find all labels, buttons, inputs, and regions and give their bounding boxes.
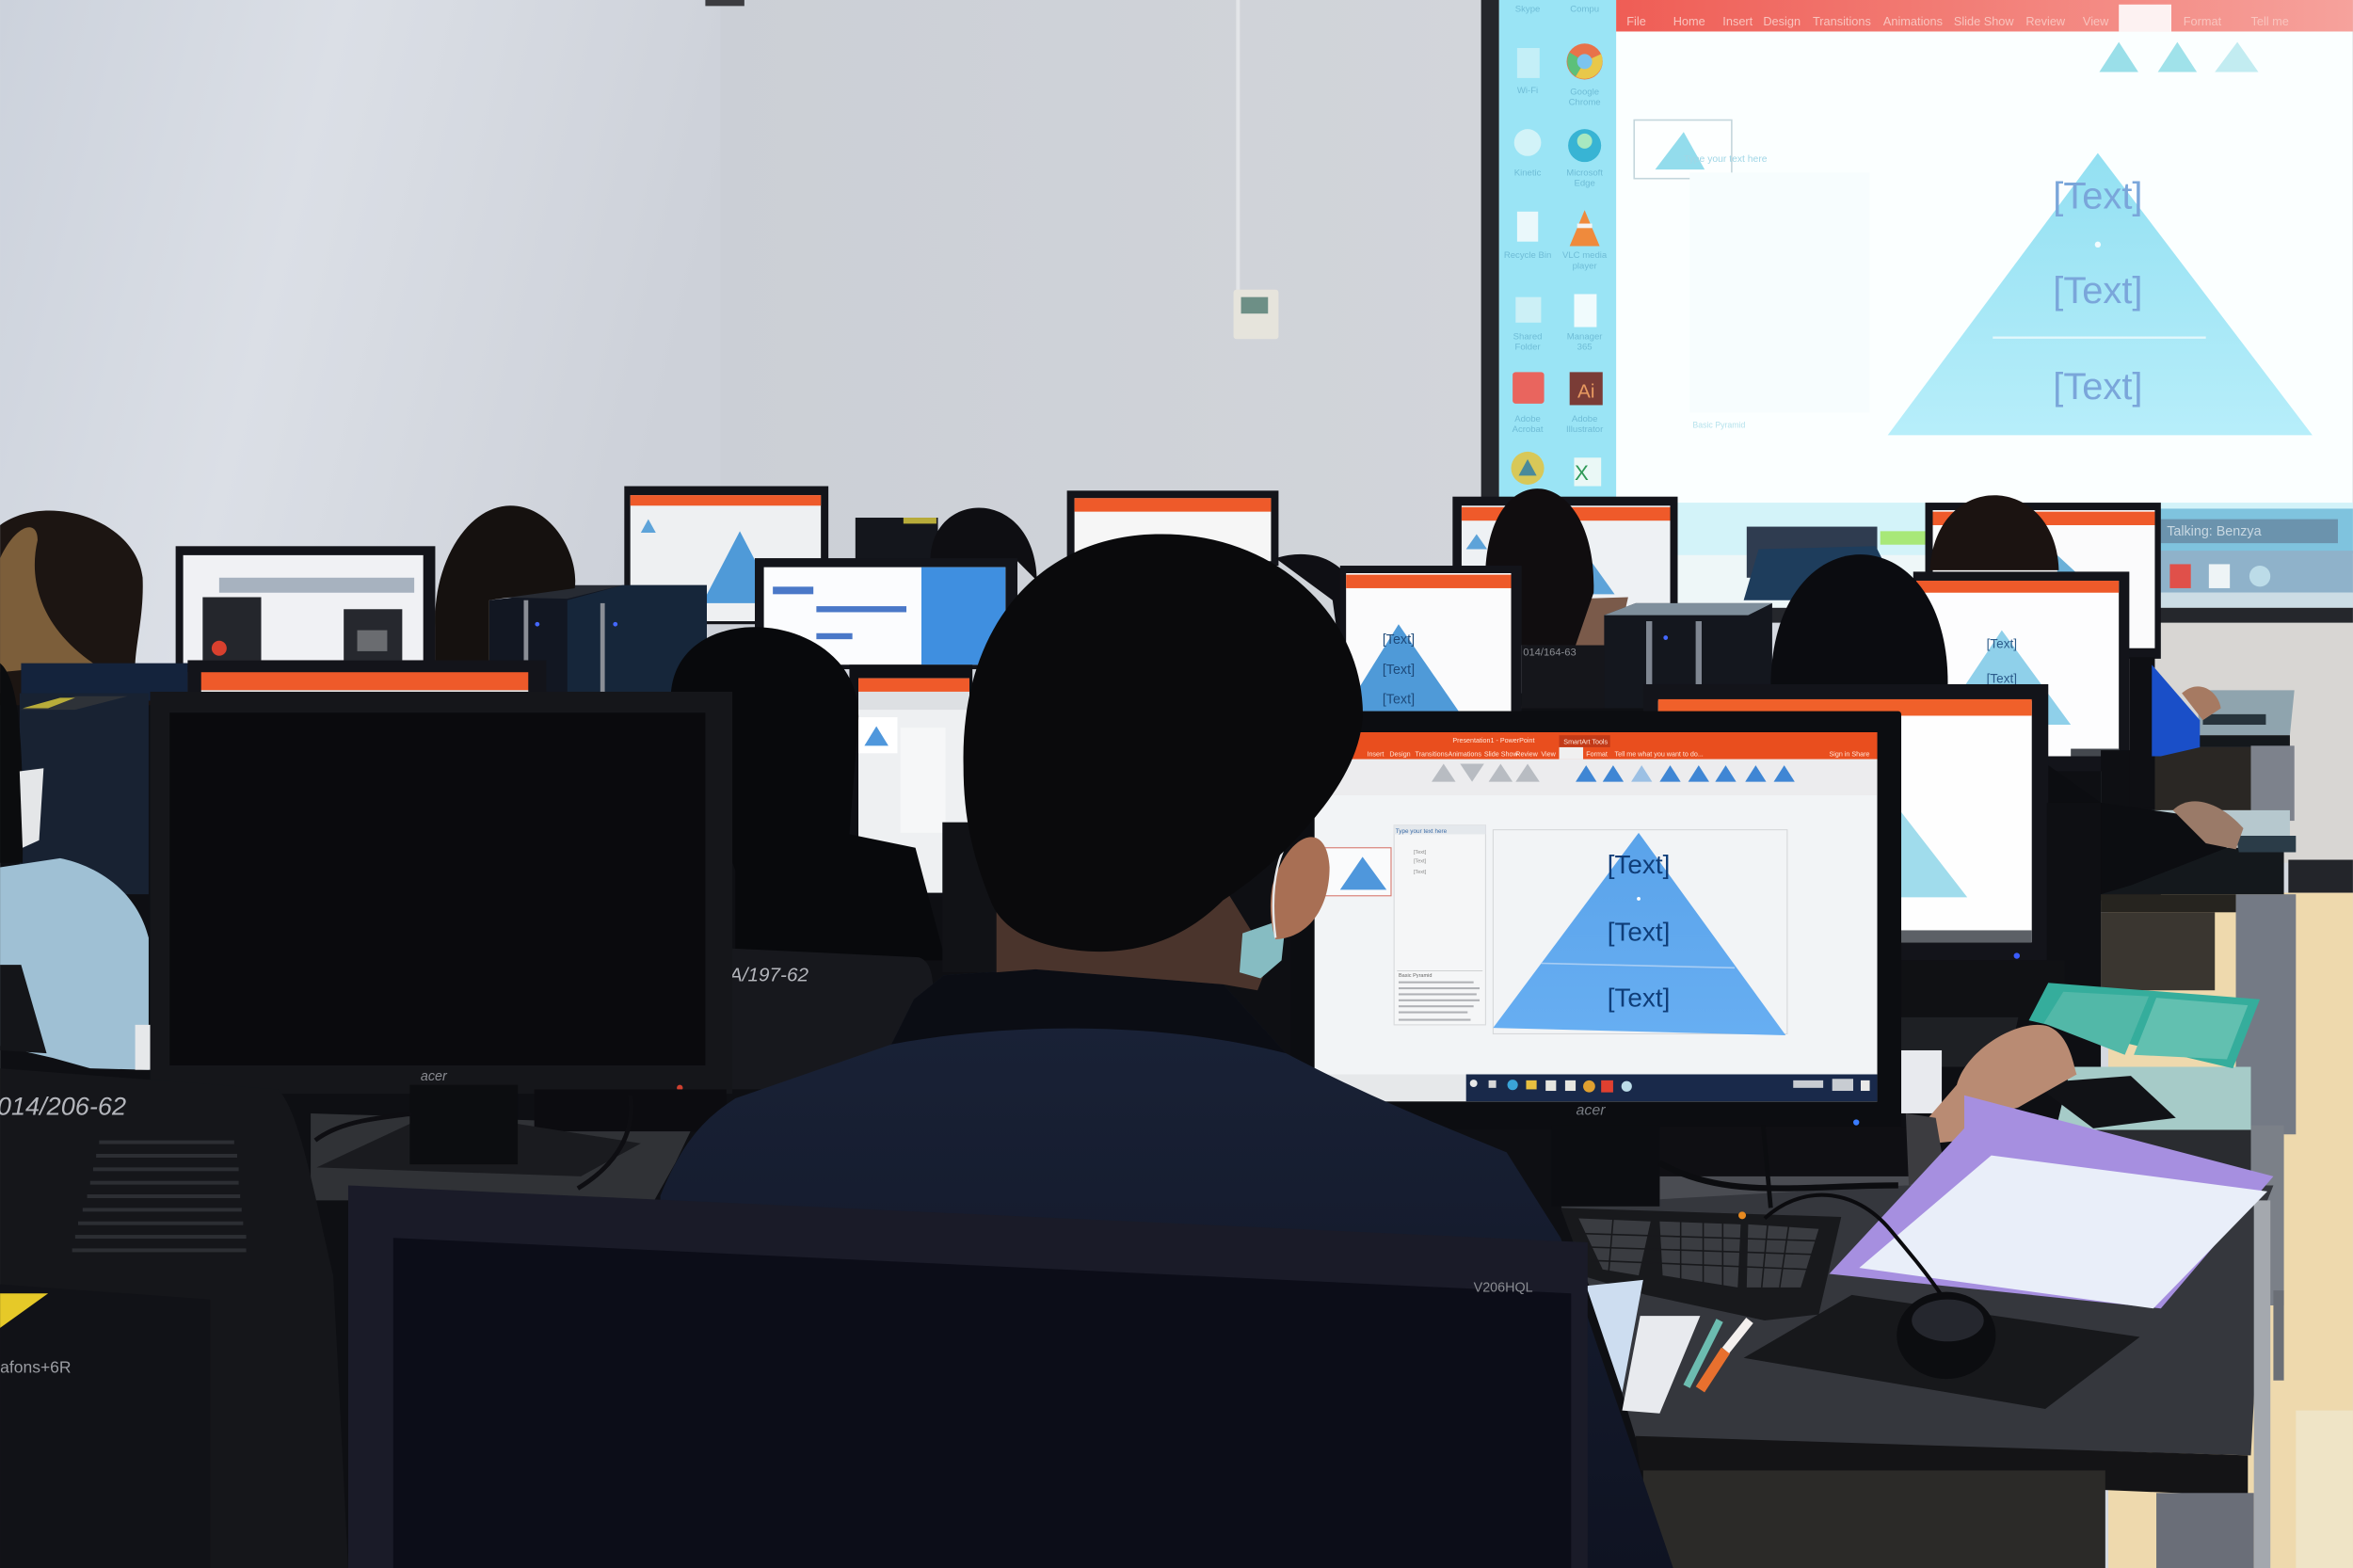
ribbon: Share bbox=[1851, 751, 1870, 759]
tower next to head bbox=[942, 823, 998, 972]
back monitor right of centre bbox=[1452, 497, 1677, 616]
desk underside bbox=[1643, 1470, 2105, 1568]
main monitor with pyramid slide: acer bbox=[1577, 1103, 1606, 1119]
smartart text pane: Basic Pyramid bbox=[1399, 973, 1433, 979]
large dark monitor foreground: V206HQL bbox=[1474, 1281, 1533, 1296]
slide thumbnail bbox=[1325, 848, 1391, 896]
monitor behind head, left bbox=[849, 664, 972, 897]
powerpoint ribbon: View bbox=[2083, 14, 2109, 28]
ribbon gallery bbox=[1315, 760, 1878, 795]
ribbon: Insert bbox=[1367, 751, 1384, 759]
student hand and mouse at right bbox=[1901, 1025, 2176, 1185]
back row: monitors and students bbox=[0, 487, 2161, 708]
ribbon: Animations bbox=[1449, 751, 1481, 759]
black office chair with label bbox=[0, 1068, 348, 1568]
smartart text pane: Type your text here bbox=[1396, 828, 1448, 835]
chair with label bbox=[728, 949, 934, 1089]
projection screen bbox=[1481, 0, 2353, 623]
pyramid on screen: [Text] bbox=[2053, 366, 2142, 408]
main desk bbox=[1561, 1174, 2273, 1568]
tower bottom left: afons+6R bbox=[0, 1358, 72, 1377]
wall: right lower section, baseboard and floor bbox=[2108, 616, 2353, 1568]
ceiling fixture bbox=[705, 0, 744, 6]
woman far left bbox=[0, 511, 187, 705]
lower screen band: Talking: Benzya bbox=[2167, 524, 2262, 539]
hair behind main student bbox=[1275, 554, 1378, 708]
far-left second-row monitor top bbox=[187, 660, 546, 699]
desktop icons on screen: Microsoft bbox=[1566, 168, 1603, 179]
right desks and student arms bbox=[2048, 657, 2296, 1381]
thumbnail and style gallery on screen: Type your text here bbox=[1684, 154, 1768, 165]
computer towers left bbox=[489, 518, 938, 696]
powerpoint ribbon: Home bbox=[1673, 14, 1705, 28]
powerpoint ribbon: Insert bbox=[1722, 14, 1753, 28]
students in back rows: 014/164-63 bbox=[1523, 648, 1577, 659]
pyramid on screen: [Text] bbox=[2053, 176, 2142, 217]
neck bbox=[997, 886, 1270, 990]
desktop icons on screen: Adobe bbox=[1572, 414, 1597, 424]
pens bbox=[1687, 1320, 1750, 1389]
main monitor stand and rear vent bbox=[1552, 1126, 1909, 1208]
lower screen band bbox=[1500, 503, 2353, 608]
green folder bbox=[2029, 983, 2260, 1068]
face mask bbox=[1240, 919, 1286, 978]
tower in front, right of centre bbox=[1604, 603, 1772, 708]
desktop icons on screen: Folder bbox=[1515, 342, 1541, 352]
second keyboard behind bbox=[1901, 1017, 2018, 1067]
purple folder with papers bbox=[1830, 1096, 2273, 1308]
monitor with pyramid at right: [Text] bbox=[1987, 671, 2017, 685]
wall: centre section bbox=[720, 0, 1489, 631]
monitor with pyramid and text: [Text] bbox=[1383, 663, 1415, 678]
large dark monitor foreground bbox=[348, 1185, 1588, 1568]
slide selection frame bbox=[1493, 830, 1787, 1033]
mouse pad bbox=[1744, 1295, 2140, 1409]
papers next to keyboard bbox=[1586, 1280, 1700, 1414]
left side student in light blue bbox=[0, 664, 153, 1070]
powerpoint ribbon: Slide Show bbox=[1954, 14, 2014, 28]
desk surface bbox=[1561, 1185, 2273, 1455]
powerpoint ribbon: Format bbox=[2184, 14, 2222, 28]
wall: left section bbox=[0, 0, 724, 705]
student behind head, left bbox=[671, 627, 945, 960]
back monitor far right bbox=[1926, 503, 2161, 659]
powerpoint ribbon: Transitions bbox=[1813, 14, 1871, 28]
woman left of towers bbox=[435, 505, 575, 660]
ear bbox=[1271, 837, 1330, 939]
thumbnail and style gallery on screen: Basic Pyramid bbox=[1692, 420, 1745, 429]
desktop icons on screen: Chrome bbox=[1569, 98, 1601, 108]
ribbon: Format bbox=[1586, 751, 1608, 759]
desktop icons on screen bbox=[1504, 5, 1608, 487]
head above blue screen bbox=[931, 508, 1037, 581]
ribbon: Tell me what you want to do... bbox=[1615, 751, 1704, 759]
ribbon bbox=[1315, 732, 1878, 760]
ribbon: Transitions bbox=[1415, 751, 1449, 759]
shirt bbox=[661, 969, 1673, 1568]
powerpoint ribbon: File bbox=[1626, 14, 1646, 28]
ribbon: View bbox=[1541, 751, 1557, 759]
monitor with blue window bbox=[755, 558, 1017, 669]
desktop icons on screen: Manager bbox=[1567, 331, 1603, 342]
back monitor centre bbox=[1067, 490, 1278, 566]
dark backdrop behind desks bbox=[0, 694, 2101, 1568]
desktop icons on screen: X bbox=[1575, 461, 1589, 485]
taskbar bbox=[1315, 1074, 1878, 1101]
slide pyramid bbox=[1493, 833, 1785, 1035]
large dark monitor left bbox=[151, 692, 732, 1094]
monitor with pyramid at right: [Text] bbox=[1987, 637, 2017, 651]
mask strap bbox=[1273, 828, 1295, 937]
pyramid on screen bbox=[1888, 153, 2313, 435]
desktop icons on screen: 365 bbox=[1577, 342, 1593, 352]
tower bottom left bbox=[0, 1285, 210, 1568]
students in back rows bbox=[0, 488, 2058, 708]
third desk surface bbox=[2056, 1067, 2250, 1129]
dark zone behind right monitors bbox=[2101, 750, 2161, 901]
second row: monitors bbox=[0, 554, 2296, 1381]
main monitor with pyramid slide bbox=[1290, 712, 1901, 1129]
desktop icons on screen: player bbox=[1573, 261, 1597, 271]
powerpoint ribbon: Design bbox=[1763, 14, 1801, 28]
ribbon: SmartArt Tools bbox=[1563, 739, 1609, 746]
ribbon: Review bbox=[1515, 751, 1539, 759]
pyramid on screen: [Text] bbox=[2053, 270, 2142, 312]
third desk front edge and shadow bbox=[2063, 1129, 2250, 1190]
hair bbox=[964, 534, 1363, 952]
slide pyramid: [Text] bbox=[1608, 918, 1670, 947]
ribbon: Sign in bbox=[1830, 751, 1849, 759]
blue sleeve and hand bbox=[2152, 664, 2221, 757]
smartart text pane: [Text] bbox=[1414, 859, 1427, 865]
thermostat on wall bbox=[1234, 0, 1278, 339]
desktop icons on screen: Wi-Fi bbox=[1517, 86, 1538, 96]
ribbon: Design bbox=[1389, 751, 1411, 759]
black office chair with label: 014/206-62 bbox=[0, 1092, 126, 1121]
powerpoint ribbon: Tell me bbox=[2250, 14, 2289, 28]
desktop icons on screen: Kinetic bbox=[1514, 168, 1542, 179]
area behind main monitor bbox=[1659, 1174, 1922, 1211]
monitor with pyramid and text: [Text] bbox=[1383, 693, 1415, 708]
left desk with monitor stand and cable bbox=[311, 1085, 727, 1200]
large dark monitor left: acer bbox=[421, 1069, 448, 1084]
slide pyramid: [Text] bbox=[1608, 984, 1670, 1013]
student at right with long hair bbox=[1770, 554, 1947, 687]
woman in pink top bbox=[1522, 598, 1628, 708]
monitor behind main, right side bbox=[1643, 684, 2048, 960]
desktop icons on screen: Google bbox=[1570, 87, 1599, 97]
thumbnail and style gallery on screen bbox=[1634, 42, 2258, 429]
tower behind monitor at right bbox=[2047, 803, 2101, 990]
smartart text pane: [Text] bbox=[1414, 850, 1427, 856]
smartart text pane: [Text] bbox=[1414, 870, 1427, 875]
collar bbox=[891, 969, 1286, 1053]
smartart text pane bbox=[1394, 825, 1485, 1025]
desktop icons on screen: Recycle Bin bbox=[1504, 250, 1551, 261]
ribbon: Slide Show bbox=[1484, 751, 1518, 759]
woman far right bbox=[1929, 495, 2058, 570]
foreground student seen from behind bbox=[661, 534, 1673, 1568]
desktop icons on screen: Ai bbox=[1577, 380, 1594, 402]
back desk bbox=[2129, 657, 2295, 821]
chair with label: A/197-62 bbox=[728, 965, 808, 986]
second desk bbox=[2101, 810, 2296, 1134]
desktop icons on screen: Edge bbox=[1574, 179, 1595, 189]
powerpoint ribbon: Review bbox=[2025, 14, 2066, 28]
dark sleeve and hand bbox=[2048, 765, 2244, 894]
area below right monitor bbox=[1899, 960, 2065, 1020]
desktop icons on screen: Shared bbox=[1513, 331, 1542, 342]
computer towers right with navy jacket bbox=[1744, 527, 1903, 600]
monitor with pyramid and text: [Text] bbox=[1383, 632, 1415, 648]
ribbon: Presentation1 - PowerPoint bbox=[1452, 737, 1534, 744]
mouse with cable bbox=[1765, 1195, 1995, 1379]
back monitor with pyramid bbox=[624, 487, 828, 624]
desktop icons on screen: Illustrator bbox=[1566, 424, 1604, 435]
desktop icons on screen: Compu bbox=[1570, 5, 1599, 15]
desktop icons on screen: Adobe bbox=[1514, 414, 1541, 424]
desktop background strip bbox=[1499, 0, 1616, 503]
main keyboard bbox=[1561, 1208, 1841, 1320]
desktop icons on screen: Skype bbox=[1515, 5, 1540, 15]
monitor with pyramid and text bbox=[1340, 566, 1522, 715]
powerpoint ribbon: Animations bbox=[1883, 14, 1943, 28]
back monitor far left with photo app bbox=[176, 546, 435, 672]
desktop icons on screen: VLC media bbox=[1562, 250, 1608, 261]
slide pyramid: [Text] bbox=[1608, 850, 1670, 879]
powerpoint ribbon bbox=[1616, 0, 2353, 31]
tower on left bbox=[20, 694, 149, 894]
desktop icons on screen: Acrobat bbox=[1513, 424, 1544, 435]
desk front edge bbox=[1636, 1436, 2248, 1496]
desk leg bbox=[2156, 1493, 2254, 1568]
monitor with pyramid at right bbox=[1913, 571, 2129, 771]
